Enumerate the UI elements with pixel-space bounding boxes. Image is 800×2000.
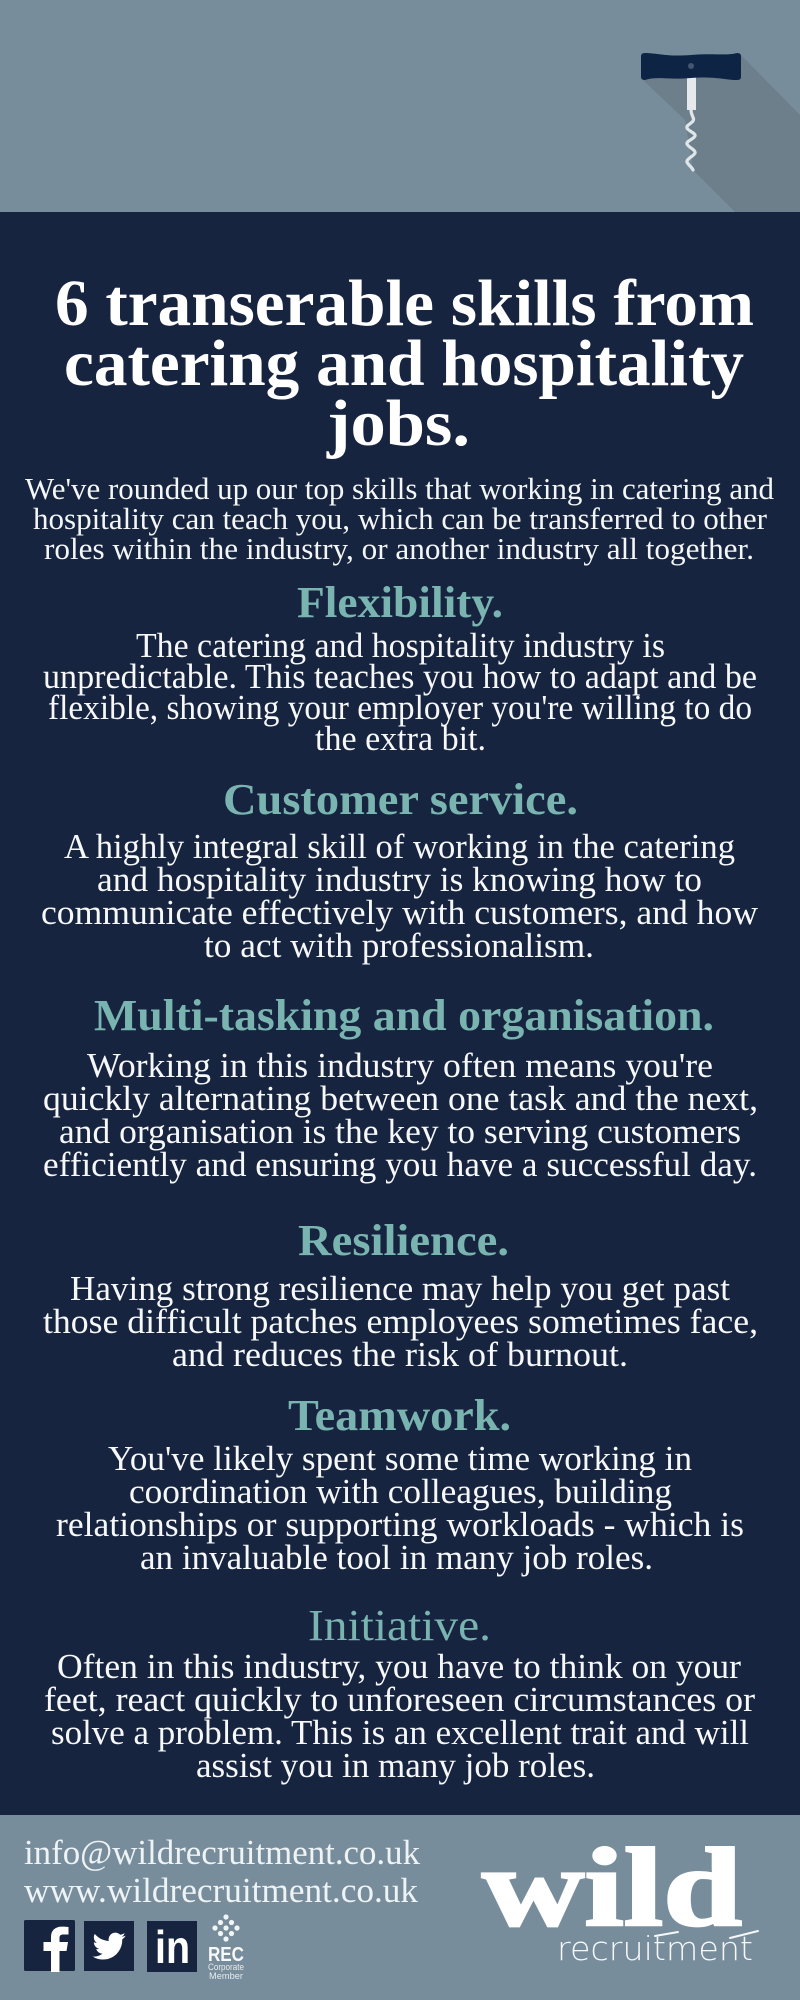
text block: Customer service: and hospitality industry is knowing how to: [97, 860, 702, 899]
intro text: [25, 471, 774, 566]
text block: Teamwork: coordination with colleagues, building: [129, 1472, 672, 1511]
text block: Customer service: communicate effectively with customers, and how: [41, 893, 759, 932]
text block: Initiative: feet, react quickly to unforeseen circumstances or: [44, 1680, 755, 1719]
title: 6 transerable skills from: [55, 267, 754, 340]
icon: LinkedIn: in: [155, 1921, 190, 1973]
heading: Customer service: Customer service.: [223, 775, 578, 824]
title: jobs.: [326, 387, 470, 460]
text block: Multi-tasking and organisation: quickly alternating between one task and the next,: [43, 1079, 758, 1118]
text block: Flexibility: flexible, showing your employer you're willing to do: [48, 688, 752, 727]
text block: Flexibility: The catering and hospitality industry is: [136, 626, 665, 665]
text block: Customer service: to act with professionalism.: [204, 926, 594, 965]
text block: Multi-tasking and organisation: and organisation is the key to serving customers: [59, 1112, 741, 1151]
text block: Resilience: and reduces the risk of burnout.: [172, 1335, 628, 1374]
heading: Teamwork: Teamwork.: [288, 1391, 511, 1440]
logo: wild recruitment: [482, 1826, 758, 1968]
heading: Multi-tasking and organisation: Multi-tasking and organisation.: [94, 991, 714, 1040]
text block: Initiative: [44, 1647, 755, 1785]
contact details: info@wildrecruitment.co.uk: [24, 1833, 420, 1872]
title: catering and hospitality: [64, 327, 744, 400]
text block: Customer service: [41, 827, 759, 965]
text block: Multi-tasking and organisation: efficiently and ensuring you have a successful day.: [43, 1145, 757, 1184]
text block: Flexibility: unpredictable. This teaches you how to adapt and be: [43, 657, 757, 696]
contact details: www.wildrecruitment.co.uk: [24, 1871, 419, 1910]
corkscrew handle rivet: [688, 63, 694, 69]
text block: Teamwork: [56, 1439, 744, 1577]
logo wordmark: wild: wild: [482, 1826, 742, 1950]
text block: Customer service: A highly integral skill of working in the catering: [64, 827, 735, 866]
text block: Initiative: solve a problem. This is an excellent trait and will: [51, 1713, 749, 1752]
icon: Facebook: [24, 1920, 75, 1972]
heading: Flexibility: Flexibility.: [297, 578, 503, 627]
text block: Resilience: those difficult patches employees sometimes face,: [43, 1302, 758, 1341]
corkscrew shaft: [687, 74, 696, 110]
heading: Initiative: Initiative.: [308, 1601, 491, 1650]
text block: Multi-tasking and organisation: [43, 1046, 758, 1184]
REC caption: Member: [209, 1971, 243, 1982]
text block: Flexibility: the extra bit.: [315, 719, 486, 758]
REC caption: [208, 1962, 244, 1982]
text block: Teamwork: relationships or supporting workloads - which is: [56, 1505, 744, 1544]
corkscrew spiral: [687, 110, 695, 170]
text block: Teamwork: an invaluable tool in many job roles.: [140, 1538, 653, 1577]
corkscrew long shadow: [643, 55, 800, 212]
panel: footer band: [0, 1815, 800, 2000]
title: [55, 267, 754, 460]
REC wordmark: REC: [208, 1944, 244, 1966]
icon: REC Corporate Member badge: [208, 1914, 244, 1982]
heading: Resilience: Resilience.: [298, 1216, 509, 1265]
intro text: roles within the industry, or another industry all together.: [44, 531, 754, 566]
icon: Twitter: [84, 1921, 134, 1971]
icon: corkscrew with long shadow: [641, 53, 800, 212]
intro text: We've rounded up our top skills that working in catering and: [25, 471, 774, 506]
text block: Teamwork: You've likely spent some time working in: [108, 1439, 692, 1478]
text block: Initiative: Often in this industry, you have to think on your: [57, 1647, 741, 1686]
text block: Flexibility: [43, 626, 757, 758]
REC diamond mark: [212, 1914, 240, 1942]
corkscrew handle: [641, 53, 741, 80]
text block: Resilience: [43, 1269, 758, 1374]
text block: Resilience: Having strong resilience may help you get past: [70, 1269, 730, 1308]
contact details: [24, 1833, 420, 1910]
text block: Multi-tasking and organisation: Working in this industry often means you're: [87, 1046, 713, 1085]
logo wordmark: recruitment: recruitment: [557, 1929, 753, 1968]
intro text: hospitality can teach you, which can be transferred to other: [33, 501, 768, 536]
REC caption: Corporate: [208, 1962, 244, 1973]
panel: top header band: [0, 0, 800, 212]
text block: Initiative: assist you in many job roles.: [196, 1746, 595, 1785]
